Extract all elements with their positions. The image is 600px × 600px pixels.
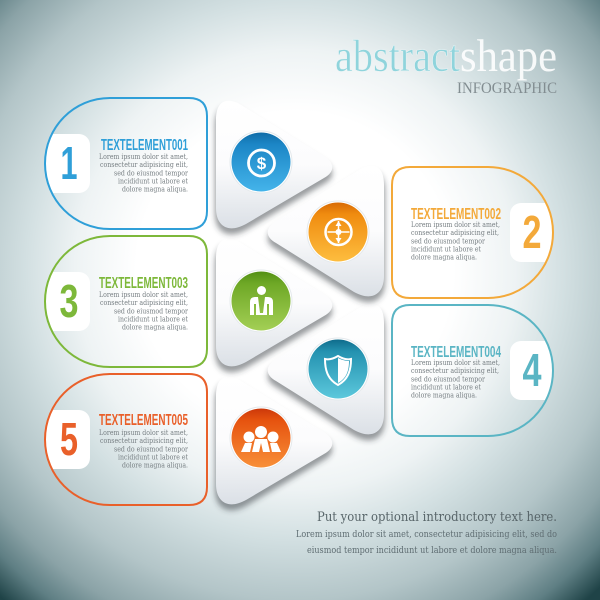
card 2: dolore magna aliqua.: [411, 254, 477, 262]
card 1: incididunt ut labore et: [118, 178, 188, 186]
triangle 5 with team icon: [215, 377, 332, 510]
card 3: dolore magna aliqua.: [122, 324, 188, 332]
card 5: TEXTELEMENT005: [99, 412, 188, 429]
card 3: consectetur adipisicing elit,: [100, 299, 188, 307]
intro body text: [296, 529, 557, 556]
card 4: TEXTELEMENT004: [411, 344, 501, 361]
card 1: TEXTELEMENT001: [101, 137, 188, 154]
card 4: consectetur adipisicing elit,: [411, 367, 499, 375]
triangle 3 with person icon: [215, 239, 332, 372]
card 5: 5: [60, 413, 78, 465]
card 4: Lorem ipsum dolor sit amet,: [411, 359, 500, 367]
intro body text: eiusmod tempor incididunt ut labore et dolore magna aliqua.: [307, 545, 557, 556]
card 2: 2: [522, 206, 542, 258]
card 5: incididunt ut labore et: [118, 454, 188, 462]
card 2: TEXTELEMENT002: [411, 206, 501, 223]
card 2: incididunt ut labore et: [411, 246, 481, 254]
intro heading: Put your optional introductory text here.: [317, 510, 557, 525]
card 4: 4: [522, 344, 542, 396]
card 1: dolore magna aliqua.: [122, 186, 188, 194]
card 1: 1: [60, 137, 78, 189]
triangle 2 with compass icon: [268, 166, 385, 302]
icon: team: [241, 426, 281, 452]
intro body text: Lorem ipsum dolor sit amet, consectetur adipisicing elit, sed do: [296, 529, 557, 540]
card 3: sed do eiusmod tempor: [114, 308, 189, 316]
icon: compass: [326, 219, 352, 245]
triangle 4 with shield icon: [268, 304, 385, 440]
icon: dollar: $: [257, 154, 267, 173]
card 4: incididunt ut labore et: [411, 384, 481, 392]
subtitle: INFOGRAPHIC: [457, 80, 557, 97]
triangle 1 with dollar icon: [215, 101, 332, 234]
card 4: dolore magna aliqua.: [411, 392, 477, 400]
card 2: [392, 167, 570, 298]
card 5: [30, 374, 207, 505]
card 5: consectetur adipisicing elit,: [100, 437, 188, 445]
card 5: sed do eiusmod tempor: [114, 446, 189, 454]
card 3: TEXTELEMENT003: [99, 275, 188, 292]
title: abstract: [335, 30, 460, 81]
card 5: dolore magna aliqua.: [122, 462, 188, 470]
card 2: consectetur adipisicing elit,: [411, 229, 499, 237]
card 5: Lorem ipsum dolor sit amet,: [99, 429, 188, 437]
card 3: Lorem ipsum dolor sit amet,: [99, 291, 188, 299]
title: shape: [460, 30, 557, 81]
card 4: [392, 305, 570, 436]
icon: person: [250, 286, 273, 315]
card 3: 3: [60, 275, 78, 327]
card 3: [30, 236, 207, 367]
card 1: [30, 98, 207, 229]
card 2: sed do eiusmod tempor: [411, 238, 486, 246]
card 1: sed do eiusmod tempor: [114, 170, 189, 178]
card 3: incididunt ut labore et: [118, 316, 188, 324]
card 1: Lorem ipsum dolor sit amet,: [99, 153, 188, 161]
card 1: consectetur adipisicing elit,: [100, 161, 188, 169]
card 4: sed do eiusmod tempor: [411, 376, 486, 384]
title: [335, 30, 557, 81]
icon: shield: [325, 356, 351, 385]
card 2: Lorem ipsum dolor sit amet,: [411, 221, 500, 229]
